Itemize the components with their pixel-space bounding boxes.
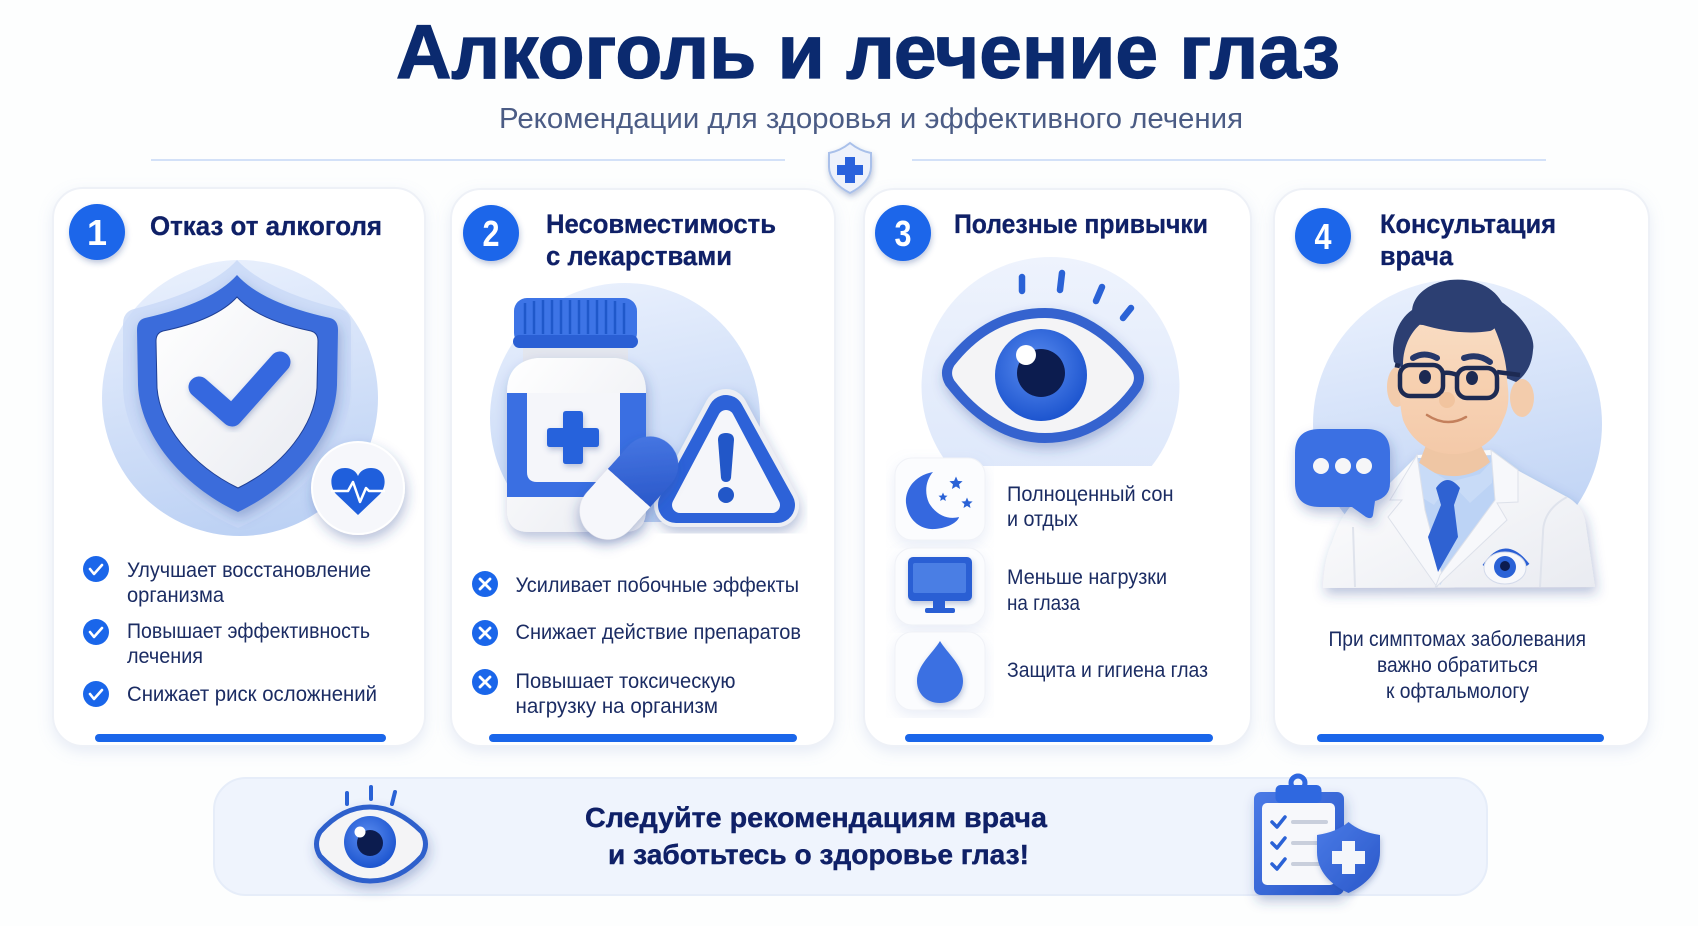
illustration: pill bottle, capsule and warning [490, 283, 777, 553]
bullet list [83, 556, 377, 707]
heading: Отказ от алкоголя [150, 211, 382, 241]
number badge 2 [463, 205, 519, 261]
title: Алкоголь и лечение глаз [396, 10, 1340, 95]
number badge 3: 3 [894, 213, 912, 254]
panel: bottom banner [214, 776, 1487, 895]
habit labels: и отдых [1007, 508, 1078, 531]
side hair [1393, 298, 1533, 382]
coat [1323, 450, 1595, 588]
hair quiff [1412, 280, 1506, 332]
heading: Консультация [1380, 209, 1556, 239]
heading: Полезные привычки [954, 209, 1208, 239]
advice text [1328, 628, 1586, 703]
glasses [1395, 365, 1520, 398]
illustration: shield with check [102, 260, 378, 536]
advice text: к офтальмологу [1386, 680, 1529, 703]
icon: header shield [829, 143, 871, 193]
icon tile: moon and stars [895, 458, 985, 540]
heading: с лекарствами [546, 241, 732, 271]
illustration: doctor [1313, 280, 1602, 588]
heading: врача [1380, 241, 1454, 271]
number badge 1: 1 [87, 212, 107, 253]
bullet list: Снижает действие препаратов [516, 621, 801, 644]
bullet list: нагрузку на организм [516, 695, 718, 718]
bullet list: организма [127, 584, 224, 607]
icon: speech bubble [1295, 429, 1390, 518]
coat eye patch [1484, 550, 1528, 584]
icon tile: water drop [895, 632, 985, 710]
callout text [585, 802, 1047, 870]
nose and smile [1439, 392, 1455, 408]
icon: heart badge [312, 442, 404, 534]
number badge 4: 4 [1314, 216, 1332, 257]
eyebrows [1413, 354, 1490, 362]
advice text: важно обратиться [1377, 654, 1538, 677]
bullet list: Усиливает побочные эффекты [516, 574, 799, 597]
bullet list: Улучшает восстановление [127, 559, 371, 582]
panel: Полезные привычки [864, 189, 1251, 746]
bullet list: Снижает риск осложнений [127, 683, 377, 706]
icon tile: monitor [895, 548, 985, 625]
panel: Отказ от алкоголя [53, 188, 425, 746]
advice text: При симптомах заболевания [1328, 628, 1586, 651]
illustration: eye [922, 257, 1180, 466]
icon: clipboard with shield [1254, 776, 1380, 895]
heading: Несовместимость [546, 209, 776, 239]
callout text: и заботьтесь о здоровье глаз! [608, 839, 1029, 870]
habit labels: на глаза [1007, 592, 1080, 615]
ears [1387, 367, 1407, 407]
bullet list [472, 571, 801, 718]
number badge 1 [69, 204, 125, 260]
bullet list: лечения [127, 645, 203, 668]
habit labels [1007, 483, 1208, 682]
bullet list: Повышает эффективность [127, 620, 370, 643]
habit labels: Меньше нагрузки [1007, 566, 1167, 589]
panel: Несовместимость с лекарствами [451, 189, 835, 746]
panel: Консультация врача [1274, 189, 1649, 746]
callout text: Следуйте рекомендациям врача [585, 802, 1047, 833]
heading [546, 209, 776, 271]
habit labels: Полноценный сон [1007, 483, 1174, 506]
face [1400, 322, 1508, 454]
number badge 2: 2 [482, 213, 500, 254]
number badge 4 [1295, 208, 1351, 264]
habit labels: Защита и гигиена глаз [1007, 659, 1208, 682]
heading [1380, 209, 1556, 271]
bullet list: Повышает токсическую [516, 670, 736, 693]
number badge 3 [875, 205, 931, 261]
icon: banner eye [316, 787, 426, 881]
subtitle: Рекомендации для здоровья и эффективного лечения [499, 103, 1243, 135]
